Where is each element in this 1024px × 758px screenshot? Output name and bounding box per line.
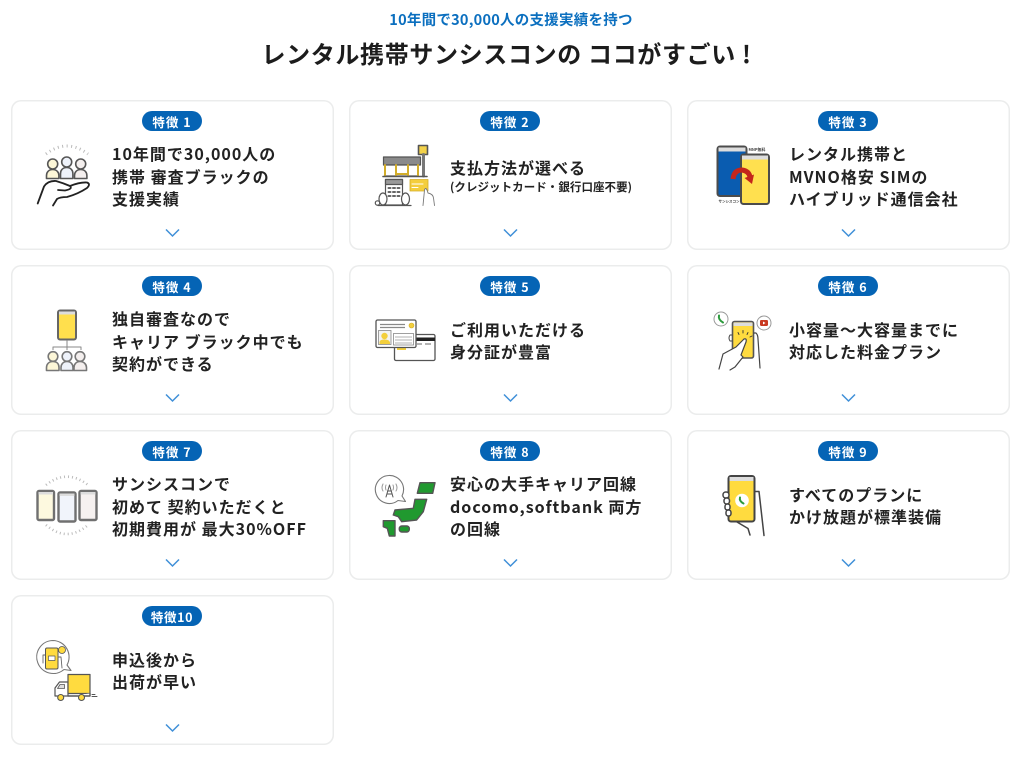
panel: feature 3	[687, 100, 1010, 250]
panel: feature 6	[687, 265, 1010, 415]
text: feature 6: 小容量〜大容量までに	[789, 317, 959, 341]
icon: two phones with switching arrow: MNP無料	[748, 146, 766, 153]
panel: feature 9	[687, 430, 1010, 580]
icon: phone linked to three people	[46, 310, 88, 372]
text: feature 5: ご利用いただける	[450, 317, 586, 341]
panel: feature 2	[349, 100, 672, 250]
badge: feature 7	[142, 441, 202, 461]
text: feature 3	[789, 141, 959, 210]
text: feature 3: レンタル携帯と	[789, 141, 908, 165]
icon: identity cards	[375, 319, 436, 362]
text: feature 8	[450, 471, 642, 540]
badge: feature 2: 特徴 2	[490, 112, 530, 131]
arrow: expand	[842, 394, 856, 402]
arrow: expand	[166, 724, 180, 732]
panel: feature 5	[349, 265, 672, 415]
icon: two phones with switching arrow: サンシスコン	[718, 198, 740, 204]
text: feature 4: 独自審査なので	[112, 306, 231, 330]
badge: feature 1: 特徴 1	[152, 112, 192, 131]
badge: feature 10	[142, 606, 202, 626]
badge: feature 3	[818, 111, 878, 131]
icon: hand tapping phone with call and video bubbles	[714, 312, 772, 371]
text: feature 7	[112, 471, 307, 540]
panel: feature 1	[11, 100, 334, 250]
text: feature 1: 携帯 審査ブラックの	[112, 164, 270, 188]
badge: feature 8	[480, 441, 540, 461]
text: feature 3: ハイブリッド通信会社	[789, 186, 959, 210]
text: feature 1: 支援実績	[112, 186, 180, 210]
badge: feature 3: 特徴 3	[828, 112, 868, 131]
badge: feature 9: 特徴 9	[828, 442, 868, 461]
text: feature 6: 対応した料金プラン	[789, 339, 942, 363]
title: レンタル携帯サンシスコンの ココがすごい !	[261, 35, 752, 70]
badge: feature 5: 特徴 5	[490, 277, 530, 296]
text: feature 10: 申込後から	[112, 647, 197, 671]
text: feature 2: 支払方法が選べる	[450, 155, 586, 179]
text: feature 1: 10年間で30,000人の	[112, 141, 276, 165]
badge: feature 8: 特徴 8	[490, 442, 530, 461]
text: feature 4: キャリア ブラック中でも	[112, 328, 304, 352]
icon: store, bank and card	[374, 144, 435, 206]
panel: feature 8	[349, 430, 672, 580]
text: feature 8: の回線	[450, 516, 501, 540]
text: feature 7: 初期費用が 最大30%OFF	[112, 516, 307, 540]
text: feature 10	[112, 647, 197, 693]
arrow: expand	[504, 229, 518, 237]
arrow: expand	[504, 394, 518, 402]
text: feature 7: サンシスコンで	[112, 471, 231, 495]
text: feature 10: 出荷が早い	[112, 669, 197, 693]
badge: feature 6	[818, 276, 878, 296]
icon: order bubble and delivery truck	[36, 640, 98, 701]
text: feature 6	[789, 317, 959, 363]
arrow: expand	[166, 394, 180, 402]
text: feature 1	[112, 141, 276, 210]
panel: feature 10	[11, 595, 334, 745]
text: feature 2	[450, 155, 632, 195]
text: feature 4	[112, 306, 304, 375]
arrow: expand	[504, 559, 518, 567]
text: feature 4: 契約ができる	[112, 351, 214, 375]
arrow: expand	[166, 559, 180, 567]
badge: feature 6: 特徴 6	[828, 277, 868, 296]
text: feature 9: すべてのプランに	[789, 482, 923, 506]
badge: feature 9	[818, 441, 878, 461]
text: feature 3: MVNO格安 SIMの	[789, 164, 928, 188]
panel: feature 7	[11, 430, 334, 580]
text: feature 9: かけ放題が標準装備	[789, 504, 942, 528]
text: feature 2: (クレジットカード・銀行口座不要)	[450, 179, 632, 195]
text: feature 9	[789, 482, 942, 528]
badge: feature 5	[480, 276, 540, 296]
icon: hand holding phone with call button	[722, 475, 765, 536]
icon: three phones	[36, 475, 98, 536]
arrow: expand	[166, 229, 180, 237]
arrow: expand	[842, 229, 856, 237]
text: feature 8: docomo,softbank 両方	[450, 494, 642, 518]
badge: feature 4	[142, 276, 202, 296]
icon: antenna bubble and map of Japan	[374, 474, 436, 537]
badge: feature 1	[142, 111, 202, 131]
text: feature 7: 初めて 契約いただくと	[112, 494, 287, 518]
badge: feature 2	[480, 111, 540, 131]
text: feature 5: 身分証が豊富	[450, 339, 552, 363]
badge: feature 7: 特徴 7	[152, 442, 192, 461]
panel: feature 4	[11, 265, 334, 415]
badge: feature 10: 特徴10	[151, 607, 193, 626]
icon: two phones with switching arrow	[716, 146, 770, 205]
subtitle: 10年間で30,000人の支援実績を持つ	[389, 9, 633, 30]
icon: people on an open hand	[36, 144, 90, 206]
arrow: expand	[842, 559, 856, 567]
badge: feature 4: 特徴 4	[152, 277, 192, 296]
text: feature 5	[450, 317, 586, 363]
text: feature 8: 安心の大手キャリア回線	[450, 471, 637, 495]
